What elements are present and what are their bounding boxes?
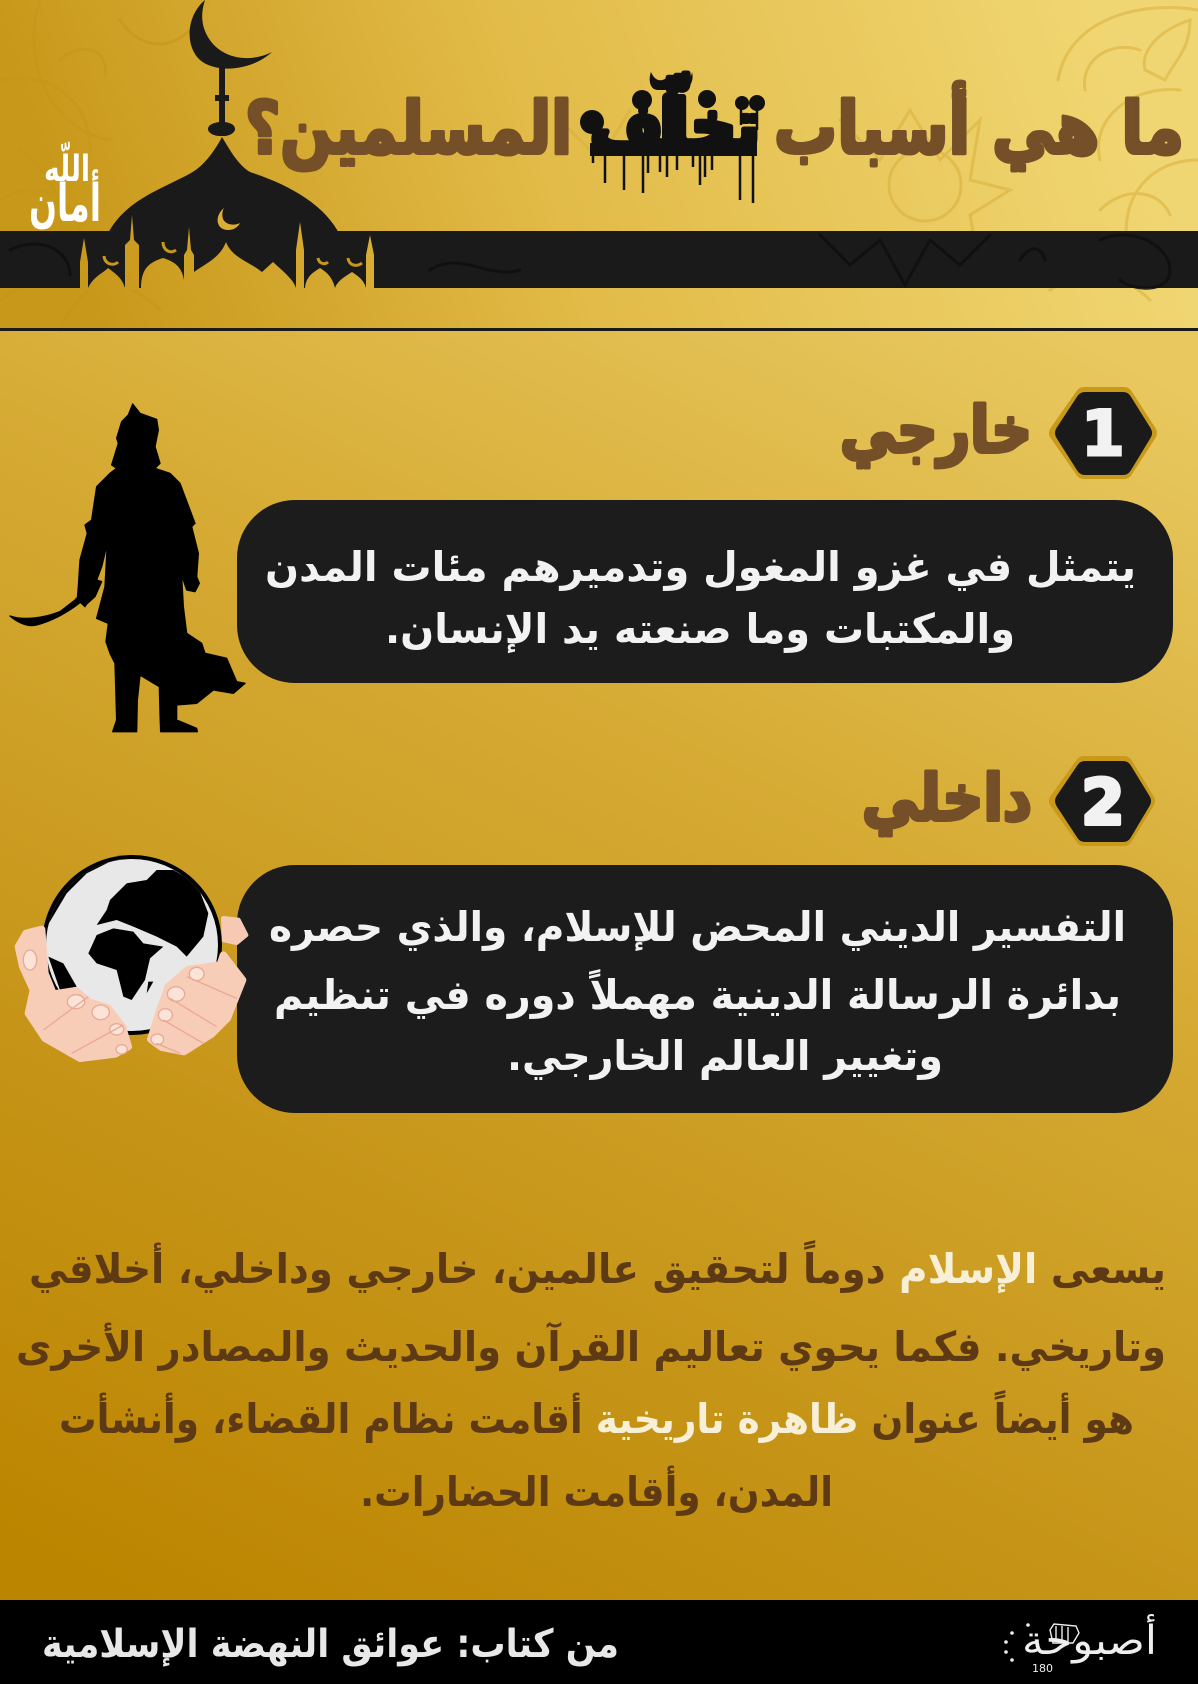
section 2 badge bbox=[1058, 765, 1146, 839]
mosque spire bbox=[208, 62, 235, 136]
mosque silhouette bbox=[80, 0, 374, 290]
section 1 badge: 1 bbox=[1081, 397, 1125, 470]
section 1 heading: خارجي bbox=[840, 394, 1032, 468]
footer logo bbox=[1004, 1614, 1157, 1675]
title: dripping word bbox=[580, 72, 765, 203]
card text bbox=[265, 543, 1136, 654]
ornaments (decorative) bbox=[0, 0, 190, 330]
footer logo: 180 bbox=[1032, 1662, 1053, 1675]
header rule bbox=[0, 328, 1198, 331]
panel: internal cause bbox=[237, 865, 1173, 1113]
globe bbox=[42, 855, 222, 1035]
card text: وتغيير العالم الخارجي. bbox=[507, 1032, 943, 1081]
card text: يتمثل في غزو المغول وتدميرهم مئات المدن bbox=[265, 543, 1136, 592]
card text: التفسير الديني المحض للإسلام، والذي حصره bbox=[269, 903, 1126, 952]
closing paragraph bbox=[16, 1240, 1166, 1517]
logo: aman allah: أمان bbox=[29, 169, 101, 234]
icon: crescent moon bbox=[190, 0, 272, 69]
left hand bbox=[18, 929, 128, 1058]
logo: aman allah bbox=[29, 141, 101, 234]
right hand bbox=[151, 955, 243, 1052]
icon: globe held in hands bbox=[18, 850, 246, 1058]
continents bbox=[48, 862, 208, 1000]
title: dripping word: تخلّف bbox=[590, 74, 760, 167]
small gold crescents bbox=[104, 242, 362, 265]
section 2 badge: 2 bbox=[1081, 766, 1125, 839]
gold mosque skyline bbox=[80, 215, 374, 290]
main dome bbox=[107, 137, 340, 290]
source text: من كتاب: عوائق النهضة الإسلامية bbox=[42, 1622, 619, 1667]
closing paragraph: يسعى الإسلام دوماً لتحقيق عالمين، خارجي وداخلي، أخلاقي bbox=[29, 1240, 1166, 1294]
closing paragraph: المدن، وأقامت الحضارات. bbox=[360, 1465, 833, 1517]
logo: aman allah: اللّه bbox=[44, 141, 90, 190]
globe back thumb bbox=[223, 918, 246, 943]
section 2 heading: داخلي bbox=[862, 762, 1032, 836]
section 1 badge bbox=[1058, 396, 1148, 470]
gold dome crescent bbox=[218, 208, 240, 230]
card text: والمكتبات وما صنعته يد الإنسان. bbox=[385, 605, 1015, 654]
card text bbox=[269, 903, 1126, 1081]
icon: warrior silhouette bbox=[10, 404, 245, 732]
footer logo: أصبوحة bbox=[1022, 1614, 1157, 1664]
title: brown part two: المسلمين؟ bbox=[245, 86, 572, 171]
footer bar bbox=[0, 1600, 1198, 1684]
closing paragraph: هو أيضاً عنوان ظاهرة تاريخية أقامت نظام القضاء، وأنشأت bbox=[59, 1390, 1134, 1444]
card text: بدائرة الرسالة الدينية مهملاً دوره في تنظيم bbox=[274, 969, 1121, 1020]
panel: external cause bbox=[237, 500, 1173, 683]
header black band bbox=[0, 231, 1198, 288]
